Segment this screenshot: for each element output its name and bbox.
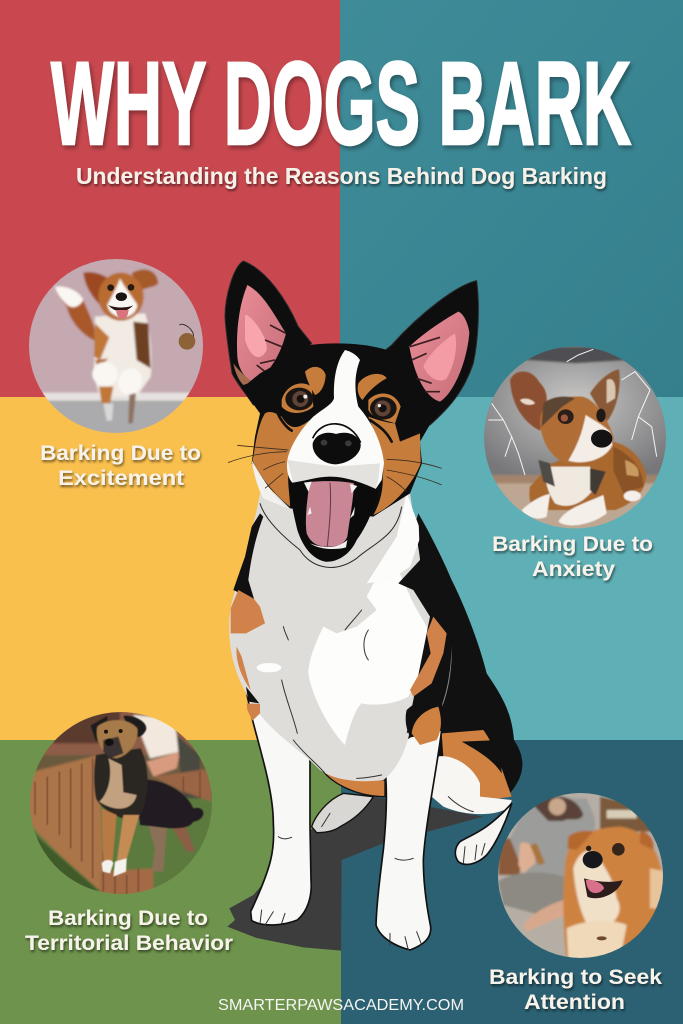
- body fur lines: [260, 610, 485, 950]
- tan patch left shoulder: [231, 590, 265, 633]
- head: [228, 343, 442, 562]
- label: anxiety: Barking Due to: [492, 533, 653, 556]
- white blaze and muzzle: [287, 350, 384, 490]
- photo circle: excited dog jumping: [29, 259, 203, 433]
- tan patch left flank: [236, 647, 251, 690]
- tan left cheek: [253, 412, 310, 507]
- open mouth: [288, 477, 378, 562]
- black and tan patch left elbow: [246, 687, 260, 721]
- label: territorial behavior: Territorial Behavior: [25, 932, 233, 955]
- ground shadow: [227, 797, 483, 951]
- chest highlight: [308, 567, 432, 745]
- label: territorial behavior: Barking Due to: [48, 907, 208, 930]
- belly: [320, 767, 385, 797]
- white cheek fringe: [252, 460, 290, 509]
- rear paw left: [312, 793, 373, 833]
- face markings: [277, 410, 392, 442]
- tan patch right shoulder: [410, 617, 447, 697]
- label: excitement: [40, 442, 201, 490]
- tan brows and eye rings: [282, 367, 401, 423]
- photo circle: territorial dog at fence: [30, 712, 212, 894]
- haunch: [397, 513, 522, 814]
- black shoulder left: [233, 513, 263, 600]
- label: excitement: Excitement: [58, 467, 184, 490]
- website footer: SMARTERPAWSACADEMY.COM: [218, 997, 464, 1014]
- left ear: [225, 261, 312, 405]
- black and tan patch right elbow: [406, 700, 442, 745]
- photo circle: anxious dog in storm: [484, 346, 666, 528]
- label: seek attention: Barking to Seek: [489, 966, 662, 989]
- white neck right: [367, 493, 422, 583]
- left foreleg: [247, 693, 311, 925]
- right ear: [383, 281, 478, 425]
- label: territorial behavior: [25, 907, 233, 955]
- white spot on flank: [257, 663, 281, 672]
- label: seek attention: [489, 966, 662, 1014]
- label: excitement: Barking Due to: [40, 442, 201, 465]
- eyes: [285, 388, 397, 420]
- photo circle: dog seeking attention: [498, 793, 663, 958]
- label: anxiety: Anxiety: [532, 558, 615, 581]
- whiskers: [228, 445, 442, 492]
- neck fold lines: [260, 503, 402, 567]
- nose: [313, 424, 361, 464]
- right foreleg: [376, 730, 442, 950]
- subtitle: Understanding the Reasons Behind Dog Barking: [76, 163, 607, 189]
- central illustrated dog: [225, 261, 522, 951]
- muzzle shade: [287, 460, 380, 490]
- label: anxiety: [492, 533, 653, 581]
- tan right cheek: [368, 417, 421, 515]
- label: seek attention: Attention: [524, 991, 625, 1014]
- rear paw right: [455, 803, 512, 864]
- black shoulder right: [398, 513, 453, 733]
- torso: [229, 493, 443, 781]
